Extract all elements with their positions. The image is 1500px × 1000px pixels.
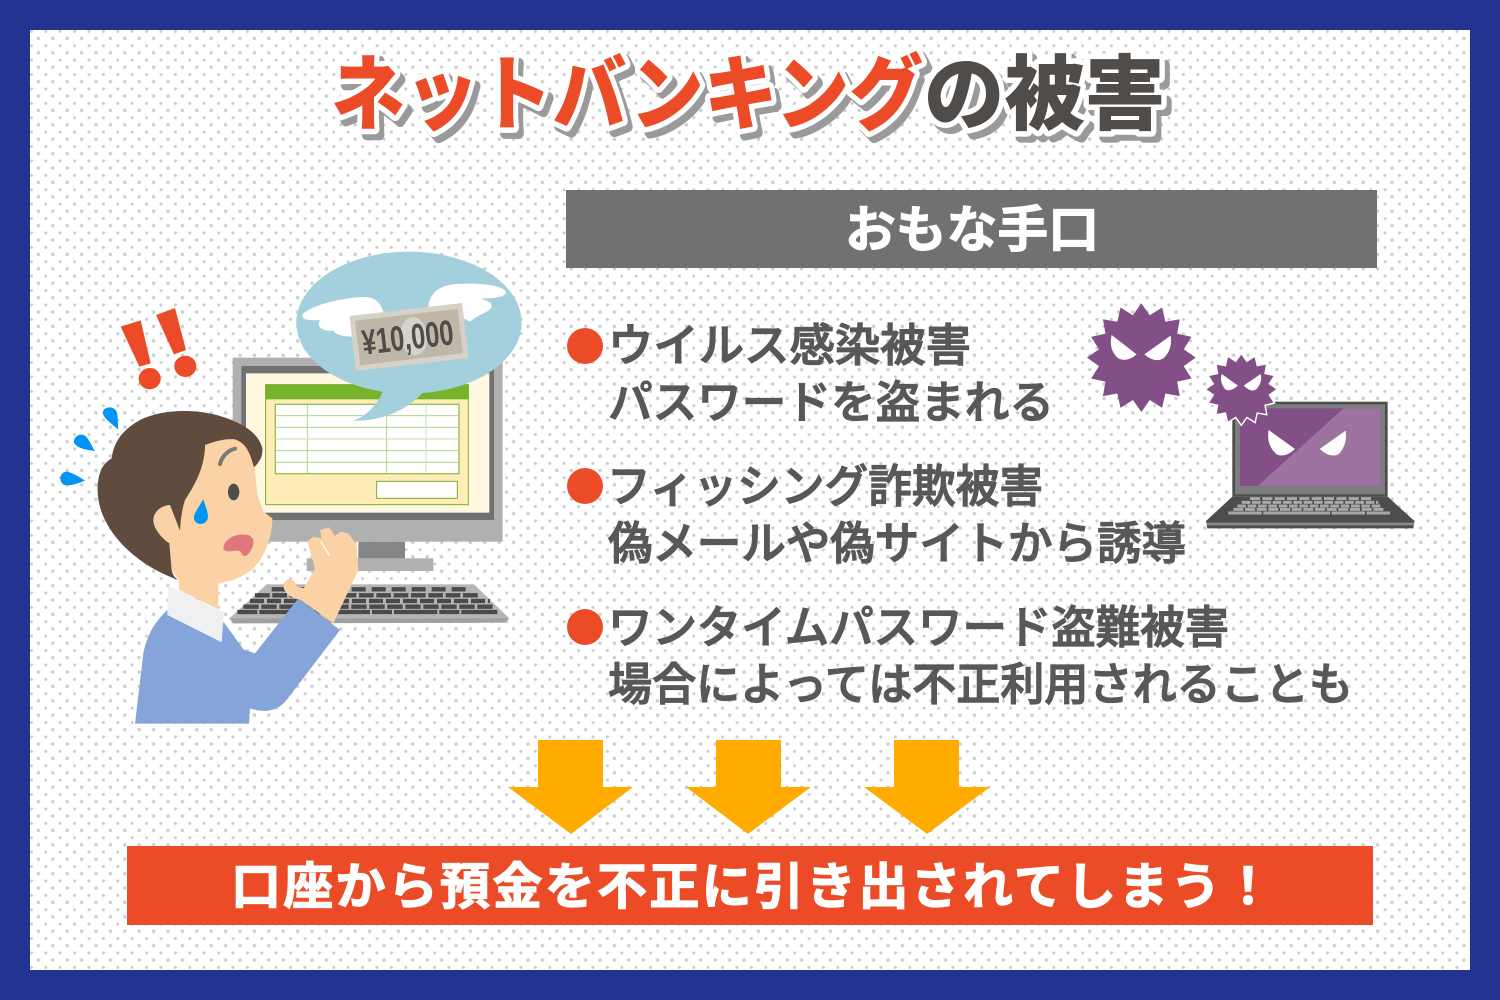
bullet 1: ウイルス感染被害	[608, 320, 971, 371]
text block: methods list	[567, 320, 1353, 710]
man: body	[135, 598, 340, 724]
illustration: worried man at computer	[60, 252, 522, 724]
callout: result banner	[127, 846, 1373, 925]
illustration: viruses and infected laptop	[1087, 303, 1414, 528]
bullet 1	[567, 320, 1054, 428]
bullet 3: ワンタイムパスワード盗難被害	[608, 602, 1229, 653]
man: face and neck	[153, 437, 272, 609]
bullet 2	[567, 461, 1186, 569]
title: ネットバンキング	[331, 50, 923, 141]
man: raised hands	[298, 527, 358, 623]
panel: heading おもな手口	[566, 190, 1377, 268]
icon: wings	[302, 284, 506, 337]
arrow 2	[686, 740, 811, 834]
icon: monitor	[233, 358, 503, 571]
icon: laptop	[1206, 402, 1414, 528]
icon: banknote: ¥10,000	[360, 313, 456, 363]
man: tear	[194, 499, 208, 524]
panel: heading おもな手口: おもな手口	[845, 202, 1099, 258]
bullet 1: パスワードを盗まれる	[608, 377, 1054, 428]
icon: sweat drops	[60, 407, 118, 485]
man: eye	[228, 484, 239, 500]
icon: exclamation marks	[121, 308, 196, 389]
bullet 3	[567, 602, 1353, 710]
icon: small virus	[1205, 353, 1277, 425]
man: collar	[167, 586, 224, 642]
arrow 1	[508, 740, 633, 834]
man: hair	[98, 411, 262, 580]
speech bubble: money flying away	[296, 252, 522, 421]
bullet 2: 偽メールや偽サイトから誘導	[608, 518, 1186, 569]
icon: keyboard	[229, 584, 509, 623]
title: の被害	[924, 50, 1165, 141]
arrow 3	[864, 740, 990, 834]
bullet 2: フィッシング詐欺被害	[607, 461, 1043, 512]
man: eyebrow	[220, 449, 235, 464]
bullet 3: 場合によっては不正利用されることも	[608, 659, 1353, 710]
icon: large virus	[1087, 303, 1196, 412]
man: mouth	[223, 534, 254, 556]
callout: result banner: 口座から預金を不正に引き出されてしまう！	[231, 859, 1273, 915]
icon: banknote	[349, 303, 468, 371]
